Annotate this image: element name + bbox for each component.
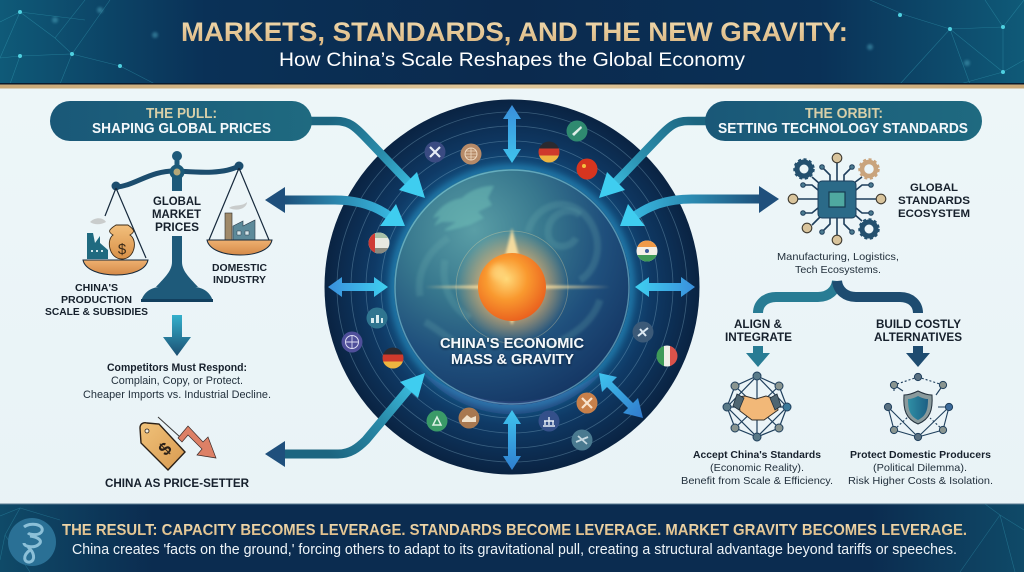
double arrow right: [635, 277, 695, 297]
scale label: global market prices: [152, 196, 201, 234]
double arrow left: [328, 277, 388, 297]
subtitle: How China’s Scale Reshapes the Global Economy: [279, 49, 745, 71]
title: MARKETS, STANDARDS, AND THE NEW GRAVITY:: [181, 17, 848, 47]
scale label: global market prices: PRICES: [155, 222, 199, 234]
label: build costly alternatives: BUILD COSTLY: [876, 319, 961, 331]
label: global standards ecosystem: [898, 182, 970, 220]
label: build costly alternatives: [874, 319, 962, 344]
label: build costly alternatives: ALTERNATIVES: [874, 332, 962, 344]
orbit icon: brown chart: [458, 408, 480, 428]
scale label: domestic industry: INDUSTRY: [213, 274, 266, 286]
connector arrow: price-setter to planet: [265, 373, 425, 467]
connector arrow: pull pill to planet: [305, 121, 425, 198]
connector arrow: orbit pill to planet: [599, 121, 712, 198]
orbit icon: brown globe: [460, 144, 482, 164]
sun core with flare: [425, 228, 610, 343]
orbit icon: capitol: [538, 410, 560, 432]
text: protect domestic producers: Protect Domestic Producers: [850, 449, 991, 461]
pill heading: the orbit: THE ORBIT:: [805, 105, 883, 122]
text: protect domestic producers: [848, 449, 993, 487]
icon: handshake network: [723, 372, 791, 441]
pill heading: the pull: THE PULL:: [146, 105, 217, 122]
center label: [440, 336, 585, 368]
panel: the orbit: [681, 101, 993, 487]
scale label: global market prices: GLOBAL: [153, 196, 201, 208]
scale label: china's production: SCALE & SUBSIDIES: [45, 306, 148, 318]
icon: price tag with falling arrow: $: [154, 438, 176, 460]
scale label: domestic industry: DOMESTIC: [212, 262, 267, 274]
orbit flag: Germany lower: [382, 348, 404, 368]
text: accept china's standards: [681, 449, 833, 487]
icon: left pan with factory and money bag: [83, 218, 148, 275]
icon: shield network: [884, 373, 953, 441]
text: manufacturing, logistics, tech: Manufacturing, Logistics,: [777, 251, 899, 263]
orbit icon: green rocket: [566, 120, 588, 142]
text: accept china's standards: (Economic Reality).: [710, 462, 804, 474]
text: accept china's standards: Accept China's Standards: [693, 449, 821, 461]
label: align and integrate: ALIGN &: [734, 319, 782, 331]
icon: circuit chip ecosystem: [788, 153, 886, 245]
two-way arrow: standards to planet: [620, 186, 779, 226]
double arrow bottom: [503, 410, 521, 470]
pill heading: the orbit: SETTING TECHNOLOGY STANDARDS: [718, 120, 968, 137]
arrow: to align: [746, 346, 770, 367]
two-way arrow: scale to planet: [265, 187, 405, 226]
text: manufacturing, logistics, tech: Tech Ecosystems.: [795, 264, 881, 276]
scale label: china's production: [45, 282, 148, 318]
footer headline: THE RESULT: CAPACITY BECOMES LEVERAGE. STANDARDS BECOME LEVERAGE. MARKET GRAVITY BECOMES LEVERAGE.: [62, 522, 967, 539]
footer banner: [0, 504, 1024, 572]
orbit flag: Germany top: [538, 142, 560, 162]
orbit icon: green network: [426, 410, 448, 432]
text: competitors must respond: Complain, Copy, or Protect.: [111, 375, 243, 387]
scale label: domestic industry: [212, 262, 267, 286]
double arrow lower right diagonal: [599, 373, 643, 418]
icon: price tag with falling arrow: [140, 417, 216, 470]
orbit icon: tools: [424, 142, 446, 162]
text: manufacturing, logistics, tech: [777, 251, 899, 276]
icon: right pan with domestic factory: [207, 202, 272, 255]
text: accept china's standards: Benefit from Scale & Efficiency.: [681, 475, 833, 487]
central gravity disc: [324, 100, 700, 474]
brace splitting into two options: [758, 281, 918, 313]
arrow: to build: [906, 346, 930, 367]
orbit flag: Italy: [656, 345, 678, 367]
label: global standards ecosystem: STANDARDS: [898, 195, 970, 207]
text: competitors must respond: Cheaper Imports vs. Industrial Decline.: [83, 389, 271, 401]
planet: [394, 169, 630, 414]
icon: left pan with factory and money bag: $: [118, 241, 127, 258]
scale label: china's production: PRODUCTION: [61, 294, 132, 306]
label: global standards ecosystem: ECOSYSTEM: [898, 208, 970, 220]
icon: balance scale: [83, 151, 272, 302]
pill heading: the pull: SHAPING GLOBAL PRICES: [92, 120, 271, 137]
orbit flag: China: [576, 158, 598, 180]
text: protect domestic producers: Risk Higher Costs & Isolation.: [848, 475, 993, 487]
orbit icon: teal building: [366, 308, 388, 328]
orbit icon: purple globe: [342, 332, 362, 352]
footer body: China creates 'facts on the ground,' forcing others to adapt to its gravitational pull, creating a structural advantage beyond tariffs or speeches.: [72, 542, 957, 558]
orbit icon: molecules: [632, 322, 654, 342]
footer logo: [8, 518, 56, 566]
text: competitors must respond: Competitors Must Respond:: [107, 362, 247, 374]
label: global standards ecosystem: GLOBAL: [910, 182, 958, 194]
header banner: [0, 0, 1024, 88]
center label: CHINA'S ECONOMIC: [440, 336, 585, 352]
label: align and integrate: [725, 319, 792, 344]
orbit flag: India: [636, 240, 658, 262]
label: align and integrate: INTEGRATE: [725, 332, 792, 344]
text: competitors must respond: [83, 362, 271, 401]
pill heading: the pull: [50, 101, 312, 141]
double arrow top: [503, 105, 521, 163]
text: protect domestic producers: (Political Dilemma).: [873, 462, 967, 474]
arrow: pull down to competitors: [163, 315, 191, 356]
orbit icon: grey scales: [572, 430, 592, 450]
scale label: china's production: CHINA'S: [75, 282, 118, 294]
panel: the pull: [45, 101, 312, 490]
center label: MASS & GRAVITY: [451, 352, 574, 368]
orbit icon: orange tools: [576, 392, 598, 414]
gears: [794, 160, 878, 238]
pill heading: the orbit: [705, 101, 982, 141]
orbit flag: UAE: [368, 232, 390, 254]
glow ring around planet: [389, 164, 635, 410]
scale label: global market prices: MARKET: [152, 209, 201, 221]
label: china as price-setter: CHINA AS PRICE-SETTER: [105, 478, 250, 490]
